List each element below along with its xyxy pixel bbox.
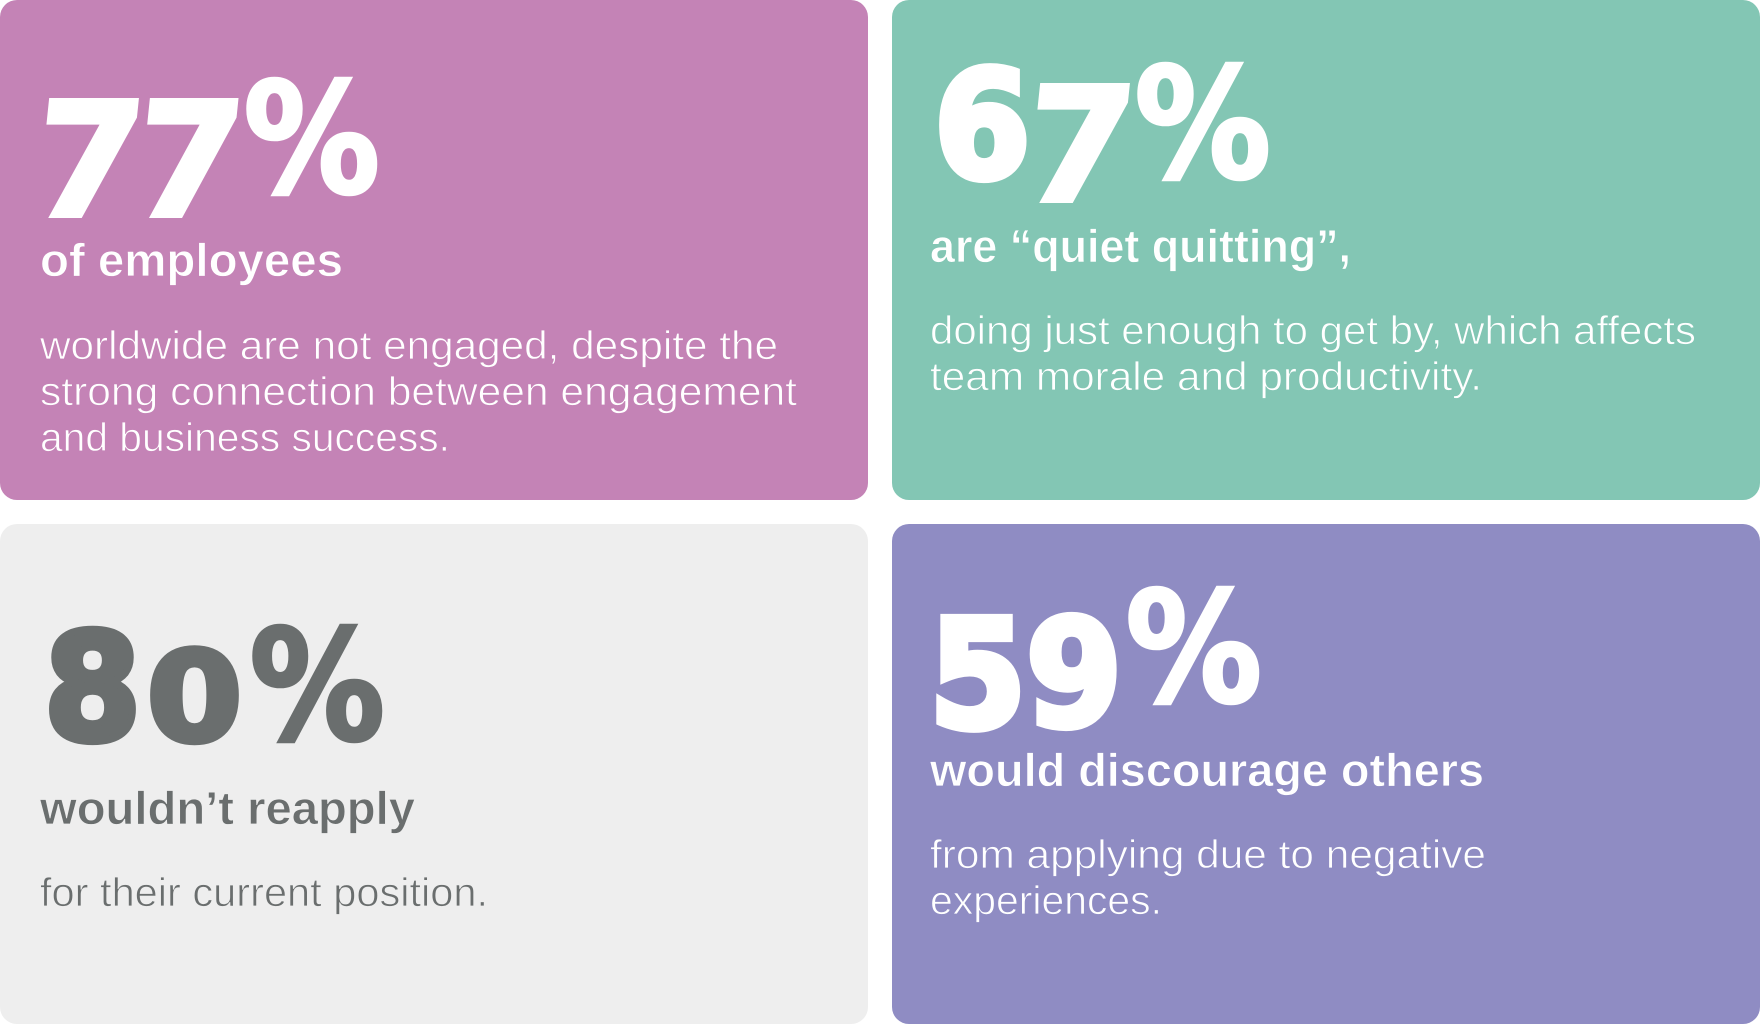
big number: 80%: 0 [147,625,242,770]
big number: 77%: 7 [126,69,251,253]
big number: 59%: 5 [929,588,1026,763]
big number: 59%: % [1126,561,1262,738]
body text: and business success. [40,416,450,460]
panel background: green [892,0,1760,500]
panel: 80% wouldn't reapply [0,524,868,1024]
panel: 67% quiet quitting [892,0,1760,500]
heading: are "quiet quitting": are “quiet quitting”, [930,220,1351,272]
panel background: light grey [0,524,868,1024]
big number: 80% [44,598,385,776]
panel background: purple [0,0,868,500]
big number: 80%: 8 [44,602,141,774]
body text [930,309,1696,399]
panel: 77% of employees [0,0,868,500]
body text: for their current position. [40,871,488,915]
big number: 67% [934,37,1271,239]
big number: 67%: 6 [934,39,1031,212]
big number: 67%: % [1135,37,1271,214]
body text: worldwide are not engaged, despite the [39,324,778,368]
big number: 59% [929,561,1262,763]
heading: wouldn't reapply: wouldn’t reapply [39,782,415,834]
big number: 77%: 7 [25,70,152,254]
big number: 67%: 7 [1016,55,1143,239]
panel background: indigo [892,524,1760,1024]
heading: would discourage others: would discourage others [929,744,1484,796]
body text: from applying due to negative [930,833,1486,877]
body text: doing just enough to get by, which affects [930,309,1696,353]
body text: experiences. [930,879,1162,923]
body text [930,833,1486,923]
body text: strong connection between engagement [40,370,797,414]
big number: 77%: % [244,52,380,229]
body text [39,324,797,460]
panel: 59% would discourage others [892,524,1760,1024]
heading: of employees: of employees [40,234,343,286]
big number: 80%: % [250,598,385,776]
body text: team morale and productivity. [930,355,1482,399]
big number: 59%: 9 [1026,588,1122,760]
big number: 77% [25,52,380,254]
